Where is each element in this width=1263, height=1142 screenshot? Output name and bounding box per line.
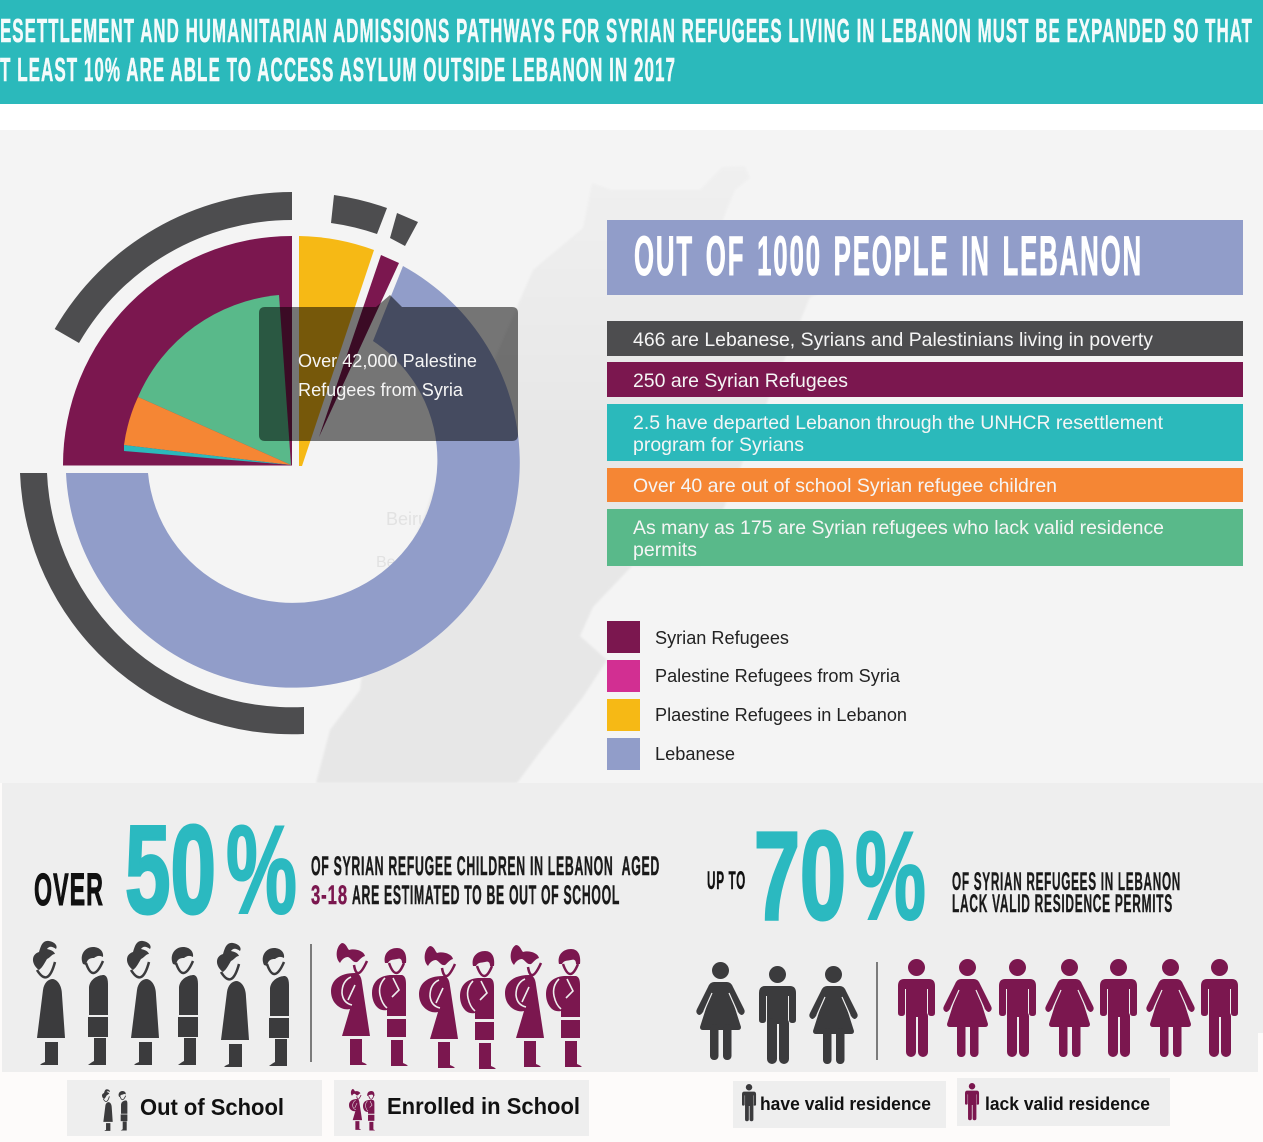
slice: resettled xyxy=(124,445,291,465)
stat row: Syrian refugees xyxy=(607,362,1243,397)
stat: over 50%: OVER xyxy=(34,864,104,915)
legend: lack valid residence: lack valid residence xyxy=(985,1094,1150,1114)
legend: have valid residence: have valid residence xyxy=(760,1094,931,1114)
stat row: residence: permits xyxy=(633,539,697,561)
pictogram: adults lacking valid residence xyxy=(898,959,1238,1057)
stat: up to 70%: 70 xyxy=(754,807,846,946)
tooltip: Over 42,000 Palestine xyxy=(298,351,477,371)
stat row: out of school xyxy=(607,468,1243,502)
legend: out of school xyxy=(67,1080,322,1136)
legend: enrolled in school: Enrolled in School xyxy=(387,1093,580,1119)
map of Lebanon: Beirut xyxy=(386,509,433,529)
pie chart xyxy=(20,192,520,734)
legend: have valid residence xyxy=(733,1081,946,1128)
slice: out of school xyxy=(124,397,291,465)
slice: Palestine refugees from Syria xyxy=(319,255,399,437)
legend: enrolled in school xyxy=(334,1080,589,1136)
legend: Palestine Refugees from Syria xyxy=(655,666,901,686)
tooltip: Refugees from Syria xyxy=(298,380,464,400)
legend: lack valid residence xyxy=(957,1078,1170,1126)
pictogram: children enrolled in school xyxy=(331,943,582,1069)
stat row: resettlement: program for Syrians xyxy=(633,434,804,456)
stat row: residence xyxy=(607,509,1243,566)
legend: Lebanese xyxy=(655,744,735,764)
stat row: out of school: Over 40 are out of school Syrian refugee children xyxy=(633,475,1057,497)
map of Lebanon: Beqaa xyxy=(376,554,422,571)
stat: over 50% xyxy=(34,801,660,940)
stat: over 50%: ARE ESTIMATED TO BE OUT OF SCHOOL xyxy=(352,880,620,910)
pictogram: adults with valid residence xyxy=(696,962,858,1064)
stat row: resettlement: 2.5 have departed Lebanon through the UNHCR resettlement xyxy=(633,412,1164,434)
top banner xyxy=(0,0,1263,104)
legend: Plaestine Refugees in Lebanon xyxy=(655,705,907,725)
stat: over 50%: 3-18 xyxy=(311,880,348,910)
stat row: residence: As many as 175 are Syrian refugees who lack valid residence xyxy=(633,517,1164,539)
legend xyxy=(607,621,907,770)
legend: out of school: Out of School xyxy=(140,1094,284,1120)
stat row: poverty: 466 are Lebanese, Syrians and Palestinians living in poverty xyxy=(633,329,1153,351)
stat: up to 70%: UP TO xyxy=(707,867,746,895)
stat: up to 70% xyxy=(707,807,1181,946)
tooltip xyxy=(259,295,518,441)
legend: Syrian Refugees xyxy=(655,628,789,648)
panel: chart section background xyxy=(0,130,1263,783)
outer ring: poverty arcs xyxy=(20,192,418,734)
slice: lack valid residence xyxy=(138,295,291,465)
stat row: poverty xyxy=(607,321,1243,356)
stat row: Syrian refugees: 250 are Syrian Refugees xyxy=(633,370,848,392)
pictogram: children out of school xyxy=(33,941,289,1067)
stat: over 50%: 50 xyxy=(125,801,216,940)
map of Lebanon xyxy=(316,166,1000,783)
slice: Lebanese xyxy=(66,266,520,688)
stat: over 50%: % xyxy=(226,801,297,940)
stat row: resettlement xyxy=(607,404,1243,461)
text: OF SYRIAN REFUGEE CHILDREN IN LEBANON AGED xyxy=(311,851,660,881)
stat: up to 70%: % xyxy=(855,807,926,946)
slice: Palestine refugees in Lebanon xyxy=(299,236,374,466)
slice: Syrian refugees xyxy=(63,236,292,466)
panel: statistics background xyxy=(2,783,1258,1072)
